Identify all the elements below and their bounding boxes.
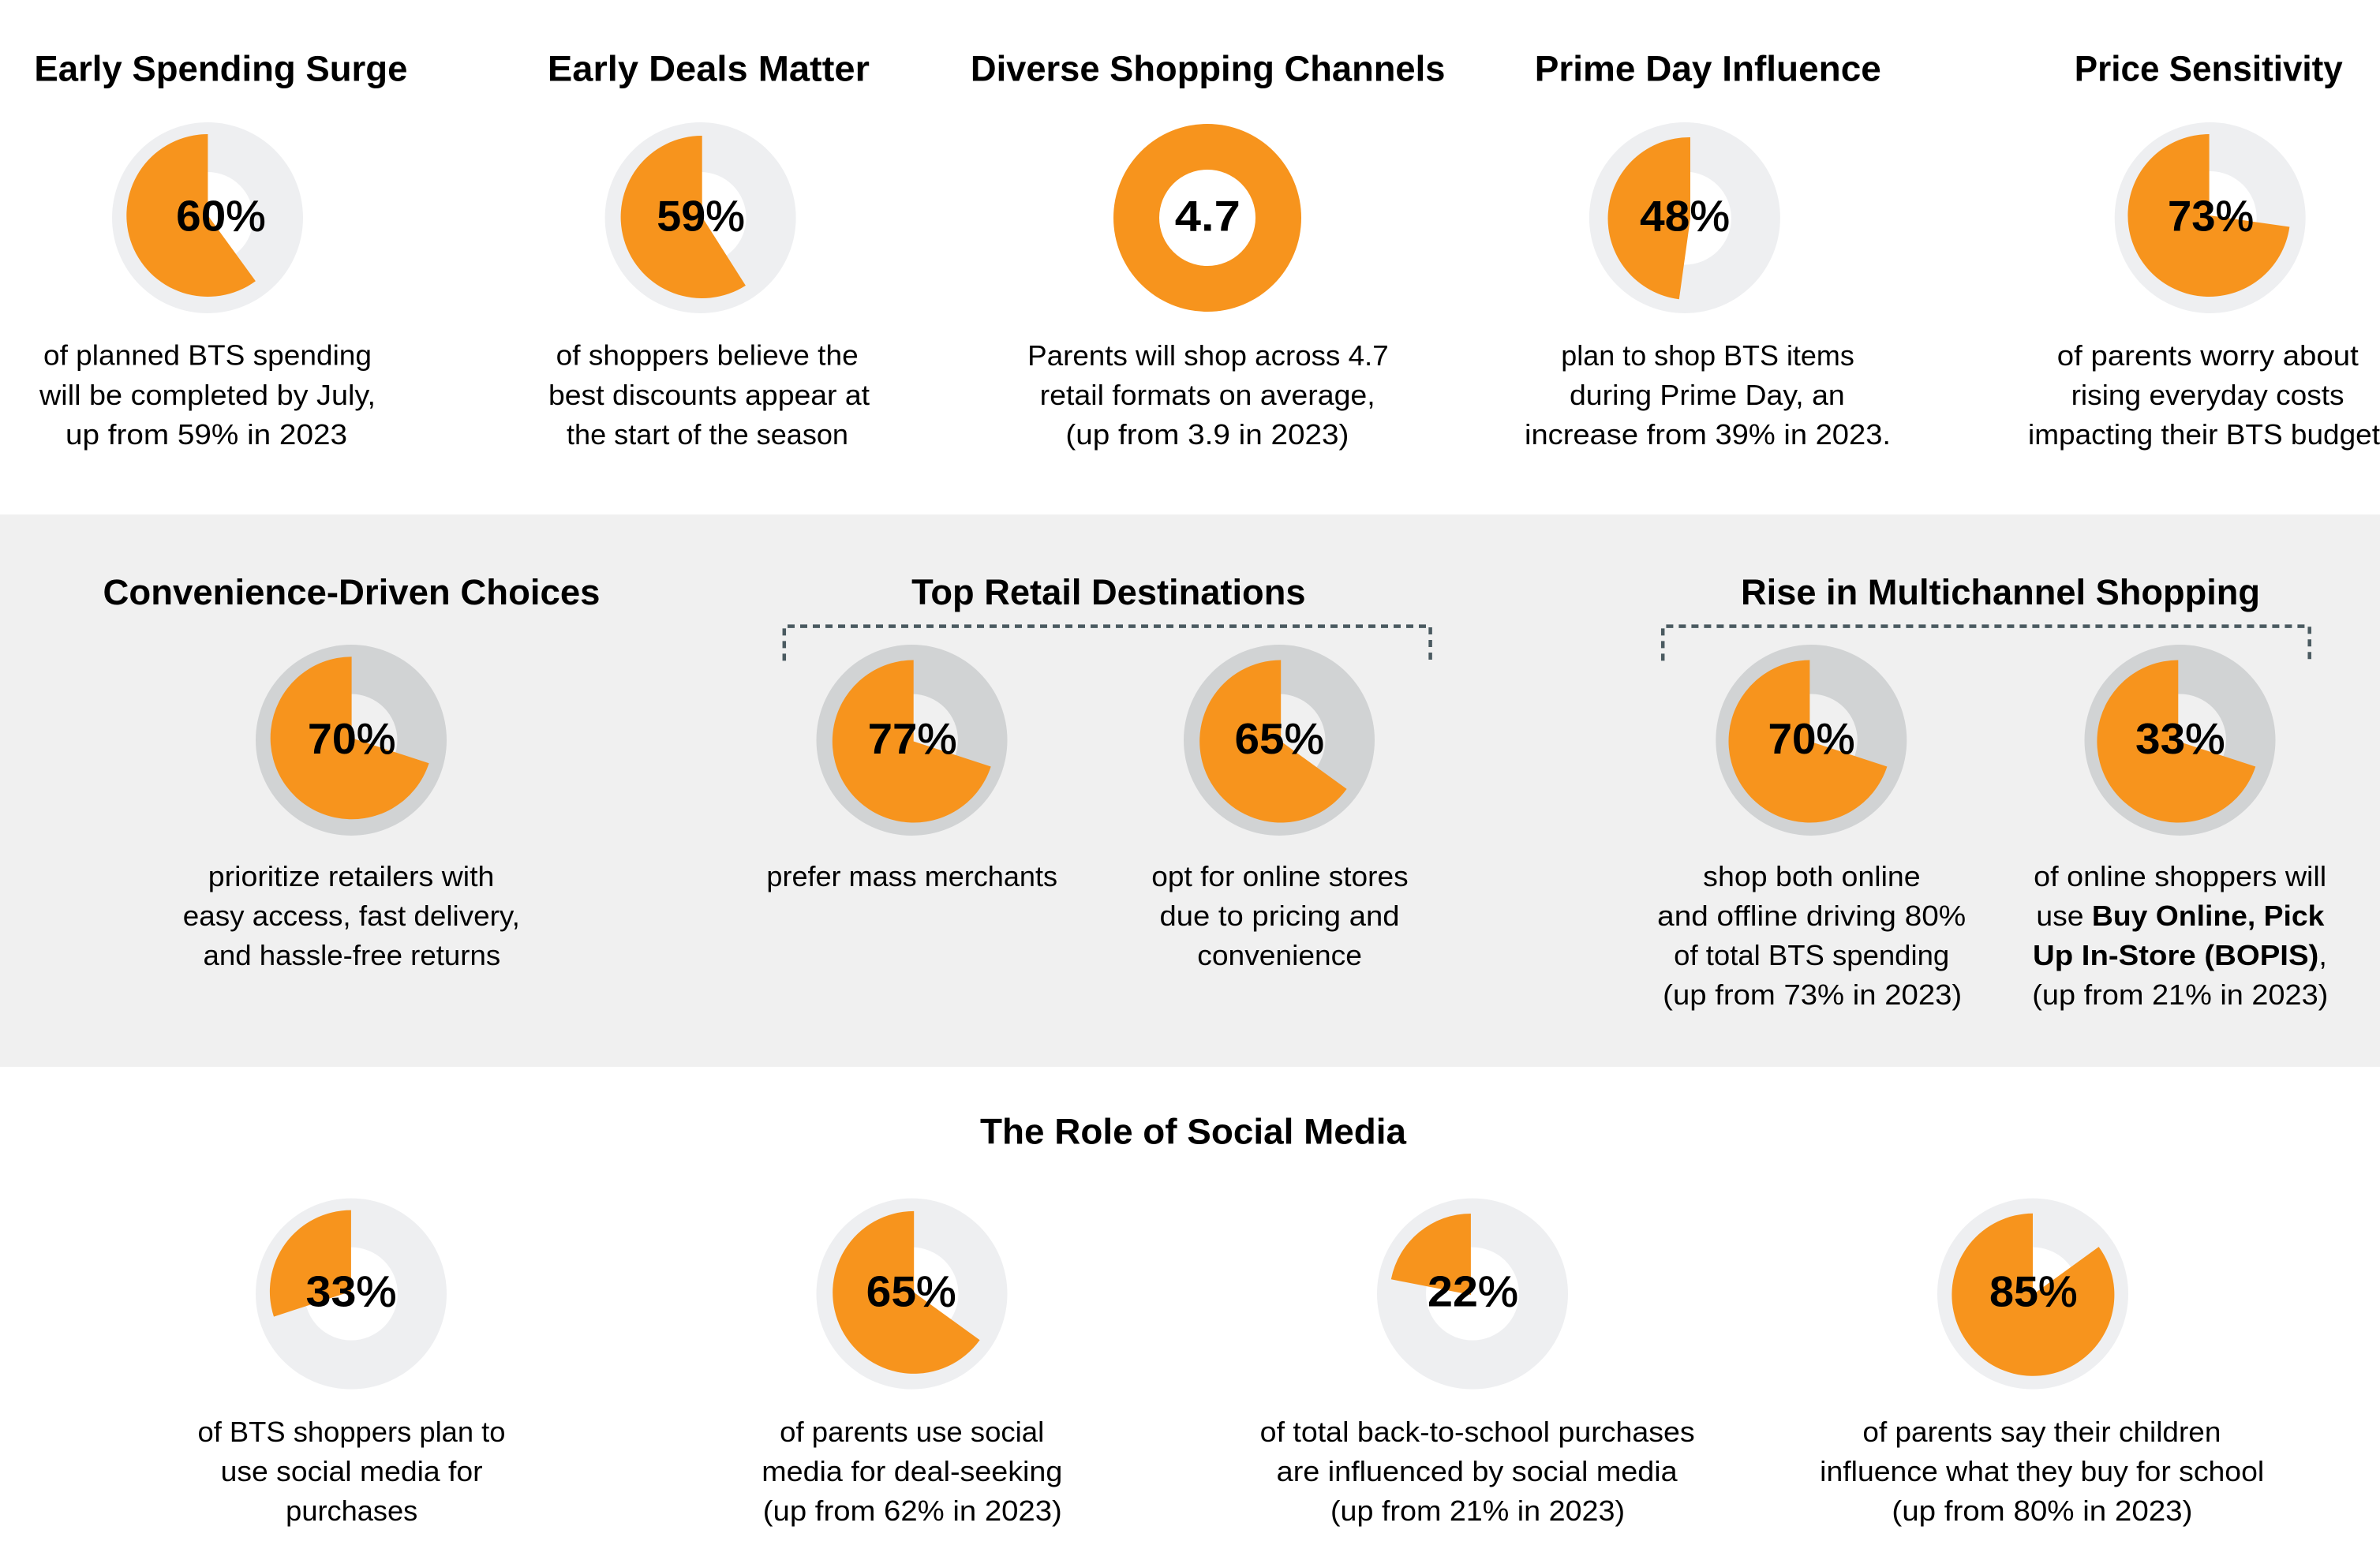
donut chart: 60%: [112, 122, 303, 313]
donut chart: 33% BOPIS: 33%: [2135, 714, 2225, 763]
text block: Prime Day description: during Prime Day, an: [1570, 379, 1845, 411]
heading: The Role of Social Media: The Role of Social Media: [980, 1112, 1407, 1152]
panel: Diverse Shopping Channels: [971, 49, 1445, 451]
donut chart: 33% BOPIS: [2085, 645, 2276, 836]
text block: early deals description: [548, 339, 870, 451]
text block: both channels description: shop both online: [1703, 860, 1921, 892]
text block: early spending description: [39, 339, 376, 451]
text block: BOPIS description: Up In-Store (BOPIS) ,: [2033, 939, 2327, 971]
donut chart: 59%: 59%: [657, 191, 745, 240]
text block: children influence description: of parents say their children: [1862, 1416, 2221, 1448]
panel: Prime Day Influence: [1525, 49, 1891, 451]
donut chart: 22% influenced purchases: 22%: [1428, 1267, 1518, 1316]
text block: BOPIS description: of online shoppers will: [2034, 860, 2326, 892]
text block: social purchases description: use social media for: [221, 1455, 483, 1487]
heading: Price Sensitivity: Price Sensitivity: [2075, 49, 2343, 88]
donut chart: 70% convenience: [256, 645, 447, 836]
text block: online stores description: due to pricing and: [1160, 900, 1400, 932]
text block: convenience description: [183, 860, 520, 971]
heading: Top Retail Destinations: Top Retail Destinations: [911, 572, 1305, 612]
heading: Rise in Multichannel Shopping: Rise in Multichannel Shopping: [1741, 572, 2260, 612]
donut chart: 85% children influence: 85%: [1989, 1267, 2078, 1316]
text block: children influence description: [1820, 1416, 2264, 1527]
donut chart: 85% children influence: [1937, 1199, 2128, 1390]
donut chart: 4.7 formats: [1113, 124, 1301, 312]
panel: The Role of Social Media: [197, 1112, 2264, 1527]
panel: Top Retail Destinations: [766, 572, 1431, 971]
donut chart: 60%: 60%: [176, 191, 266, 240]
heading: Prime Day Influence: Prime Day Influence: [1535, 49, 1881, 88]
text block: deal-seeking description: of parents use social: [780, 1416, 1044, 1448]
donut chart: 73%: [2115, 122, 2306, 313]
text block: influenced purchases description: are influenced by social media: [1277, 1455, 1678, 1487]
text block: BOPIS description: use Buy Online, Pick: [2036, 900, 2325, 932]
donut chart: 48%: [1589, 122, 1780, 313]
donut chart: 73%: 73%: [2168, 192, 2254, 241]
text block: both channels description: and offline driving 80%: [1657, 900, 1966, 932]
text block: online stores description: opt for online stores: [1151, 860, 1409, 892]
donut chart: 4.7 formats: 4.7: [1175, 192, 1241, 241]
text block: Prime Day description: increase from 39% in 2023.: [1525, 418, 1891, 451]
donut chart: 65% online stores: [1184, 645, 1375, 836]
text block: social purchases description: of BTS shoppers plan to: [197, 1416, 505, 1448]
panel: Rise in Multichannel Shopping: [1657, 572, 2328, 1011]
text block: Prime Day description: [1525, 339, 1891, 451]
donut chart: 48%: 48%: [1640, 192, 1730, 241]
text block: price sensitivity description: [2028, 339, 2380, 451]
text block: deal-seeking description: (up from 62% in 2023): [763, 1495, 1062, 1527]
text block: channels description: Parents will shop across 4.7: [1027, 339, 1389, 372]
panel: Early Spending Surge: [34, 49, 407, 451]
text block: social purchases description: purchases: [286, 1495, 417, 1527]
bracket: multichannel dashed: [1663, 627, 2310, 660]
donut chart: 70% convenience: 70%: [308, 714, 395, 763]
text block: convenience description: easy access, fast delivery,: [183, 900, 520, 932]
heading: Early Deals Matter: Early Deals Matter: [548, 49, 870, 88]
panel: Early Deals Matter: [548, 49, 870, 451]
donut chart: 70% online and offline: [1716, 645, 1907, 836]
text block: online stores description: convenience: [1197, 939, 1362, 971]
text block: both channels description: of total BTS spending: [1674, 939, 1949, 971]
donut chart: 59%: [605, 122, 796, 313]
panel: Price Sensitivity: [2028, 49, 2380, 451]
text block: influenced purchases description: [1260, 1416, 1695, 1527]
text block: early deals description: the start of the season: [567, 418, 848, 451]
panel: Convenience-Driven Choices: [103, 572, 600, 971]
text block: early deals description: best discounts appear at: [548, 379, 870, 411]
text block: price sensitivity description: impacting their BTS budget: [2028, 418, 2380, 451]
text block: children influence description: influence what they buy for school: [1820, 1455, 2264, 1487]
text block: online stores description: [1151, 860, 1409, 971]
text block: deal-seeking description: media for deal-seeking: [762, 1455, 1062, 1487]
text block: deal-seeking description: [762, 1416, 1062, 1527]
heading: Diverse Shopping Channels: Diverse Shopping Channels: [971, 49, 1445, 88]
text block: both channels description: (up from 73% in 2023): [1663, 978, 1962, 1011]
panel: gray middle band: [0, 514, 2380, 1067]
text block: early deals description: of shoppers believe the: [556, 339, 859, 371]
donut chart: 65% deal-seeking: 65%: [866, 1267, 956, 1316]
text block: both channels description: [1657, 860, 1966, 1011]
text block: Prime Day description: plan to shop BTS items: [1561, 339, 1854, 372]
heading: Convenience-Driven Choices: Convenience-Driven Choices: [103, 572, 600, 612]
heading: Early Spending Surge: Early Spending Surge: [34, 49, 407, 88]
text block: convenience description: and hassle-free returns: [204, 939, 500, 971]
donut chart: 33% social purchases: [256, 1199, 447, 1390]
text block: BOPIS description: [2032, 860, 2328, 1011]
text block: price sensitivity description: rising everyday costs: [2071, 379, 2344, 411]
donut chart: 70% online and offline: 70%: [1768, 714, 1854, 763]
text block: BOPIS description: (up from 21% in 2023): [2032, 978, 2328, 1011]
text block: convenience description: prioritize retailers with: [208, 860, 494, 892]
text block: channels description: (up from 3.9 in 2023): [1065, 418, 1349, 451]
text block: children influence description: (up from 80% in 2023): [1892, 1495, 2192, 1527]
donut chart: 65% online stores: 65%: [1234, 714, 1324, 763]
text block: influenced purchases description: of total back-to-school purchases: [1260, 1416, 1695, 1448]
text block: influenced purchases description: (up from 21% in 2023): [1330, 1495, 1625, 1527]
text block: social purchases description: [197, 1416, 505, 1527]
text block: early spending description: will be completed by July,: [39, 379, 376, 411]
donut chart: 33% social purchases: 33%: [306, 1267, 396, 1316]
bracket: retail destinations dashed: [784, 627, 1431, 660]
text block: early spending description: up from 59% in 2023: [65, 418, 347, 451]
text block: early spending description: of planned BTS spending: [43, 339, 372, 371]
text block: mass merchants description: prefer mass merchants: [766, 860, 1057, 892]
text block: channels description: [1027, 339, 1389, 451]
donut chart: 77% mass merchants: [816, 645, 1007, 836]
donut chart: 77% mass merchants: 77%: [868, 714, 957, 763]
donut chart: 22% influenced purchases: [1377, 1199, 1568, 1390]
donut chart: 65% deal-seeking: [816, 1199, 1007, 1390]
text block: price sensitivity description: of parents worry about: [2057, 339, 2359, 372]
text block: channels description: retail formats on average,: [1040, 379, 1375, 411]
